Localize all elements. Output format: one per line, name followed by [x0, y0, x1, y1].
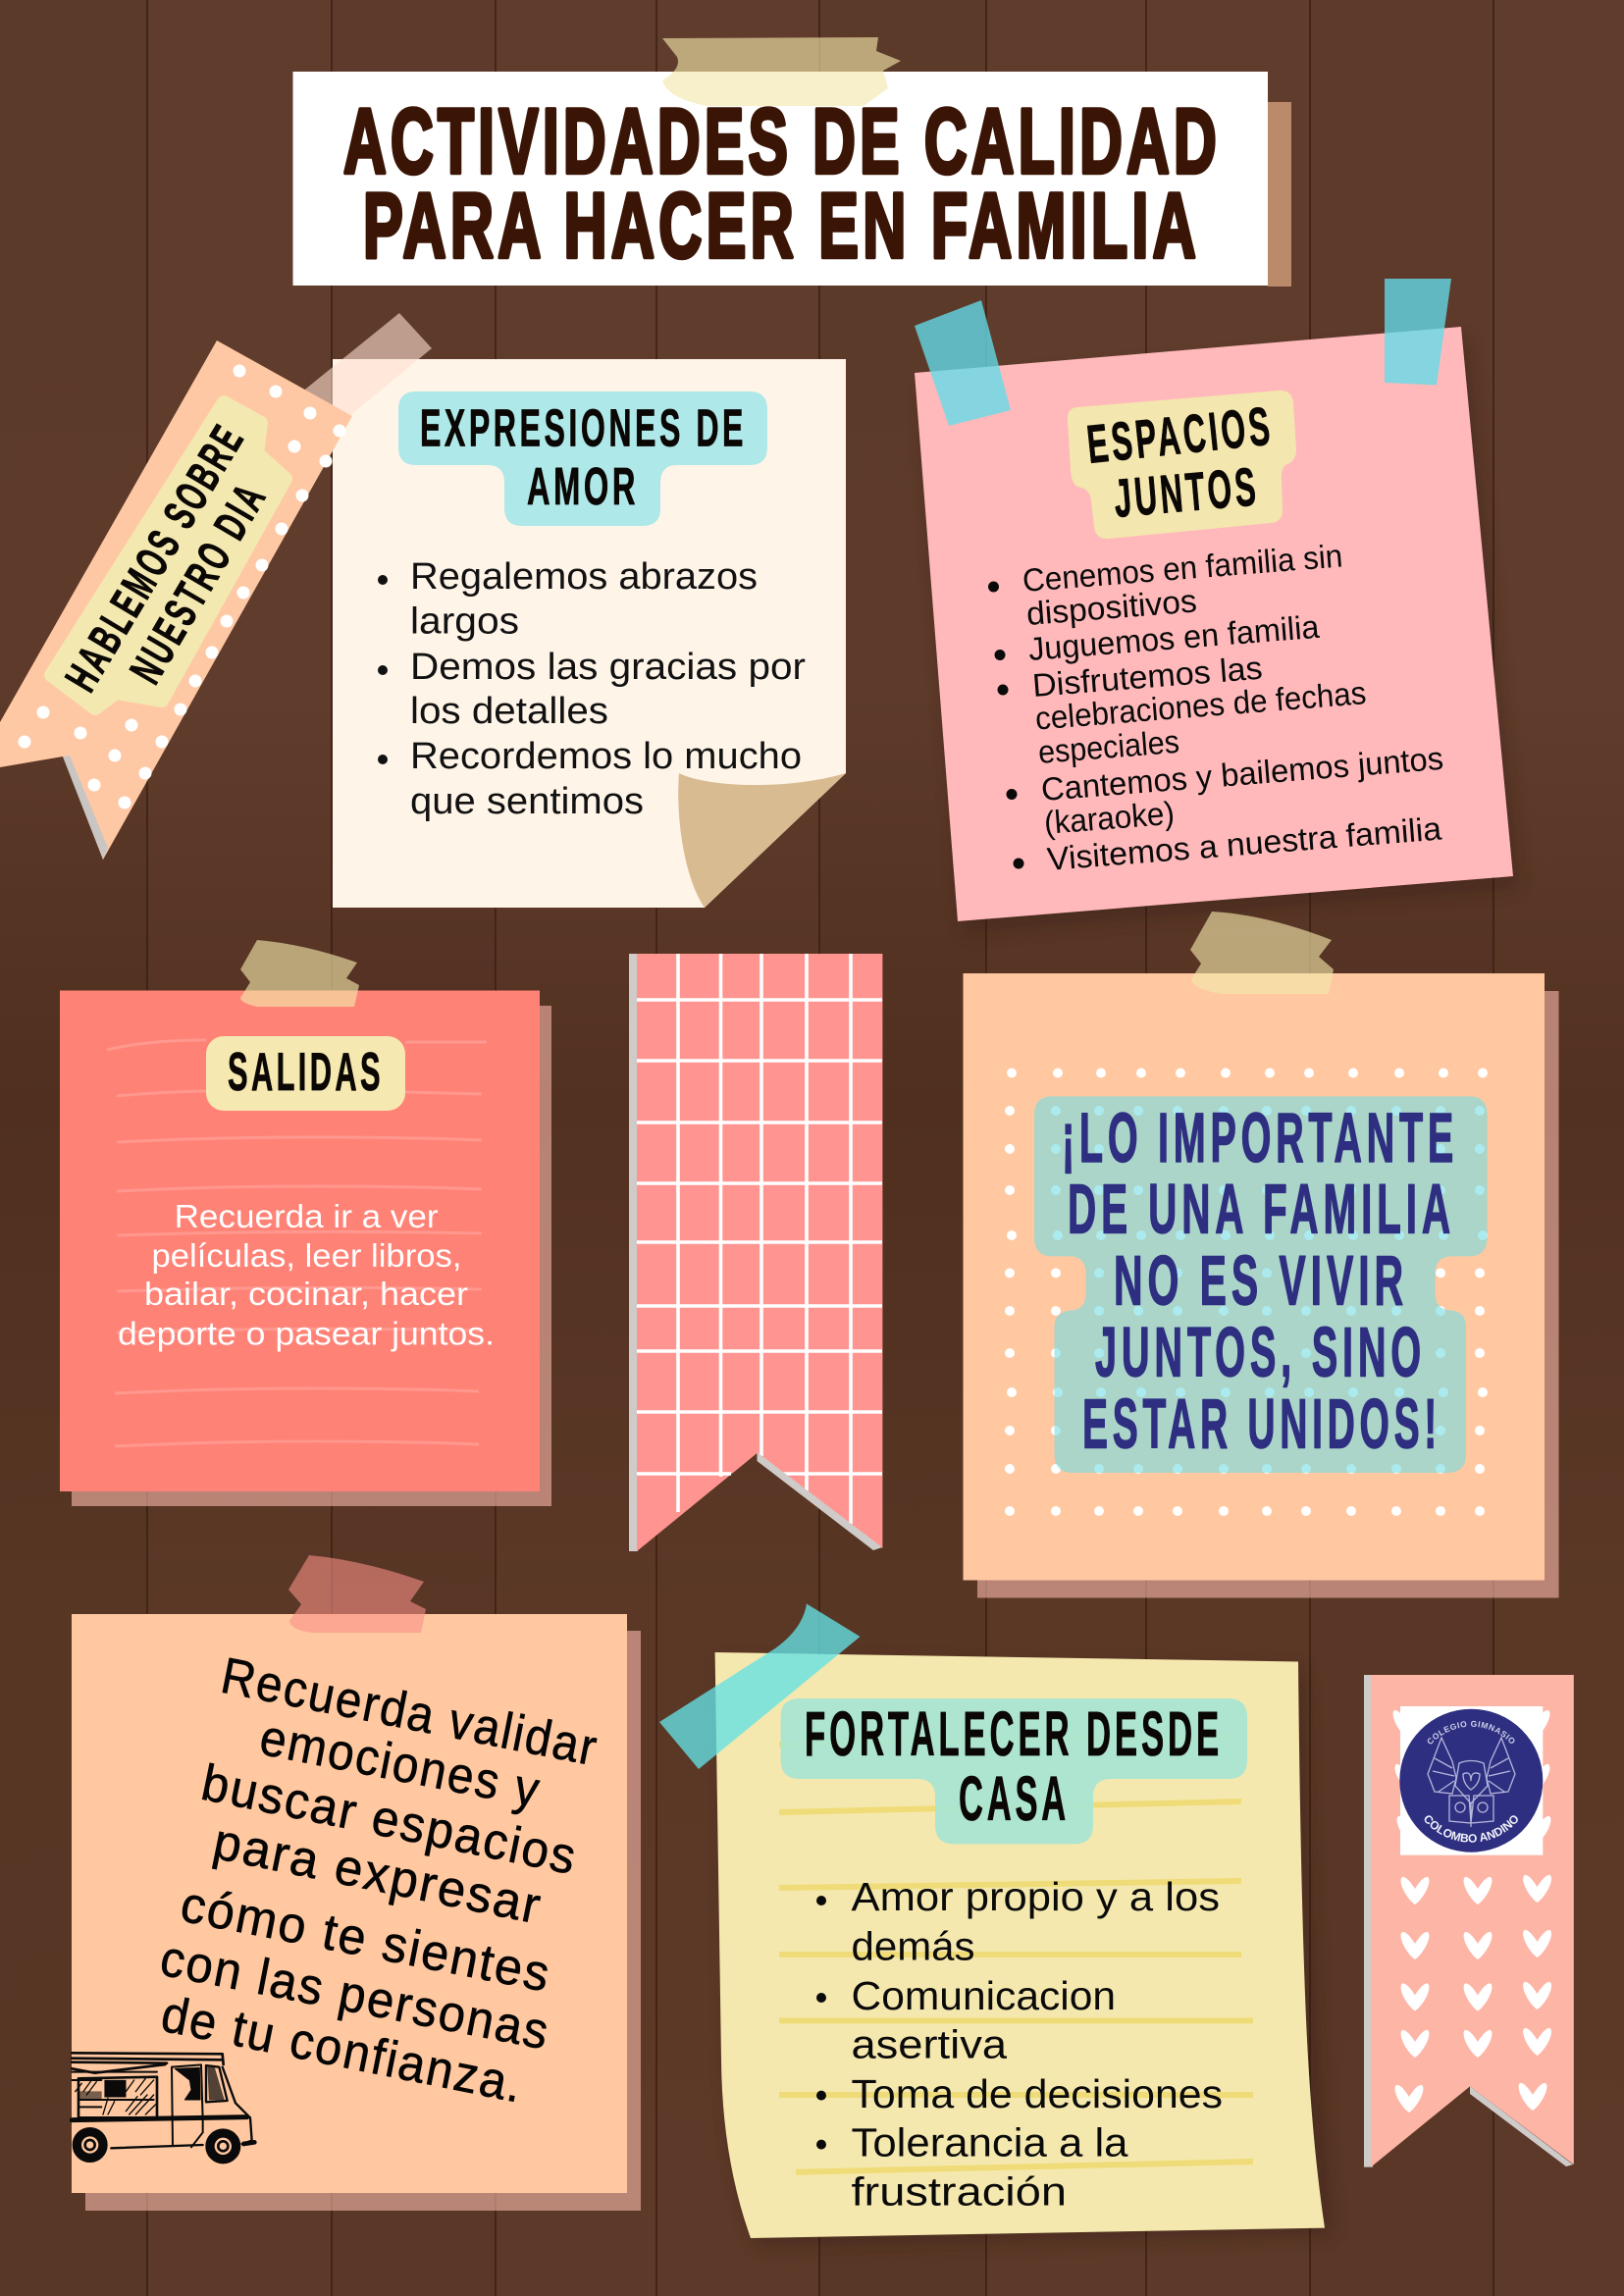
bullet list: que sentimos — [410, 781, 644, 822]
bullet list: Visitemos a nuestra familia — [1046, 809, 1443, 877]
bullet list — [821, 1874, 1223, 2215]
quote badge — [1034, 1096, 1488, 1473]
bullet list: los detalles — [410, 691, 608, 732]
school logo — [1399, 1706, 1543, 1855]
tape — [659, 1603, 860, 1769]
handwritten text: para expresar — [209, 1813, 547, 1936]
icon: hearts — [1393, 1710, 1551, 2113]
ribbon text: HABLEMOS SOBRE — [55, 414, 254, 700]
dot frame — [1010, 1073, 1483, 1511]
body text — [118, 1198, 495, 1352]
heading text: ESPACIOS — [1084, 394, 1276, 475]
ribbon text — [55, 414, 277, 700]
bullet list: (karaoke) — [1043, 795, 1176, 841]
bullet list: celebraciones de fechas — [1034, 674, 1368, 737]
quote text — [1062, 1100, 1458, 1464]
body text: películas, leer libros, — [151, 1237, 461, 1274]
bullet list: Cenemos en familia sin — [1022, 537, 1344, 599]
bullet list: Comunicacion — [852, 1973, 1116, 2018]
quote text: NO ES VIVIR — [1114, 1243, 1408, 1321]
tape right — [1385, 279, 1451, 385]
body text: deporte o pasear juntos. — [118, 1316, 495, 1352]
bullet list: Amor propio y a los — [852, 1874, 1220, 1919]
ribbon badge — [51, 402, 286, 708]
bullet list: frustración — [852, 2169, 1067, 2215]
heading badge — [781, 1698, 1247, 1844]
bullet list: Regalemos abrazos — [410, 556, 758, 598]
bullet list: Juguemos en familia — [1027, 608, 1321, 667]
title tape — [662, 37, 901, 106]
ribbon: grid bookmark — [629, 954, 882, 1551]
school logo: COLEGIO GIMNASIO — [1427, 1721, 1515, 1745]
bullet list: demás — [852, 1923, 975, 1968]
tape — [1190, 912, 1334, 994]
body text: bailar, cocinar, hacer — [144, 1276, 468, 1312]
heading text: AMOR — [527, 457, 639, 516]
bullet list: Recordemos lo mucho — [410, 736, 802, 777]
panel: quote card — [964, 912, 1558, 1597]
ribbon text: NUESTRO DIA — [120, 473, 277, 692]
bullet list: dispositivos — [1025, 582, 1198, 632]
title banner: PARA HACER EN FAMILIA — [363, 174, 1200, 277]
page curl — [678, 773, 846, 908]
handwritten text: buscar espacios — [197, 1754, 582, 1886]
bullet list: asertiva — [852, 2021, 1007, 2066]
bullet list: Toma de decisiones — [852, 2071, 1223, 2116]
panel: espacios juntos — [915, 279, 1519, 933]
handwritten text — [156, 1647, 603, 2114]
bullet list: Demos las gracias por — [410, 647, 806, 688]
bullet list: Disfrutemos las — [1031, 650, 1264, 704]
body text: Recuerda ir a ver — [175, 1198, 439, 1234]
title banner — [292, 37, 1291, 287]
tape: pale tape on ribbon — [265, 313, 432, 461]
handwritten text: con las personas — [156, 1930, 554, 2061]
bullet list: Cantemos y bailemos juntos — [1040, 740, 1444, 808]
heading text — [420, 398, 747, 516]
panel: salidas — [60, 940, 551, 1506]
tape — [240, 940, 359, 1007]
bullet list: Tolerancia a la — [852, 2120, 1128, 2166]
heading text: CASA — [959, 1763, 1070, 1834]
handwritten text: de tu confianza. — [157, 1986, 529, 2114]
heading text: JUNTOS — [1112, 455, 1261, 529]
heading badge — [1068, 391, 1296, 539]
bullet list — [993, 537, 1444, 877]
handwritten text: emociones y — [255, 1709, 546, 1819]
heading text: EXPRESIONES DE — [420, 398, 747, 457]
bullet list: largos — [410, 600, 519, 642]
tape — [288, 1555, 426, 1633]
heading badge — [398, 391, 767, 526]
handwritten text: Recuerda validar — [217, 1647, 603, 1778]
bullet list — [383, 556, 806, 822]
ribbon: hearts and logo — [1364, 1675, 1574, 2167]
heading badge — [206, 1036, 405, 1111]
ribbon: hablemos sobre nuestro dia — [0, 340, 352, 860]
school logo: COLOMBO ANDINO — [1425, 1815, 1518, 1843]
heading text — [1084, 394, 1276, 529]
bullet list: especiales — [1037, 723, 1180, 770]
panel: recuerda validar — [72, 1555, 641, 2211]
panel: expresiones de amor — [333, 359, 846, 908]
icon: van sketch — [72, 2053, 254, 2160]
tape left — [915, 300, 1011, 426]
heading text — [805, 1698, 1223, 1834]
panel: fortalecer desde casa — [659, 1603, 1333, 2247]
heading text: FORTALECER DESDE — [805, 1698, 1223, 1769]
handwritten text: cómo te sientes — [176, 1876, 555, 2004]
heading text: SALIDAS — [228, 1041, 384, 1102]
